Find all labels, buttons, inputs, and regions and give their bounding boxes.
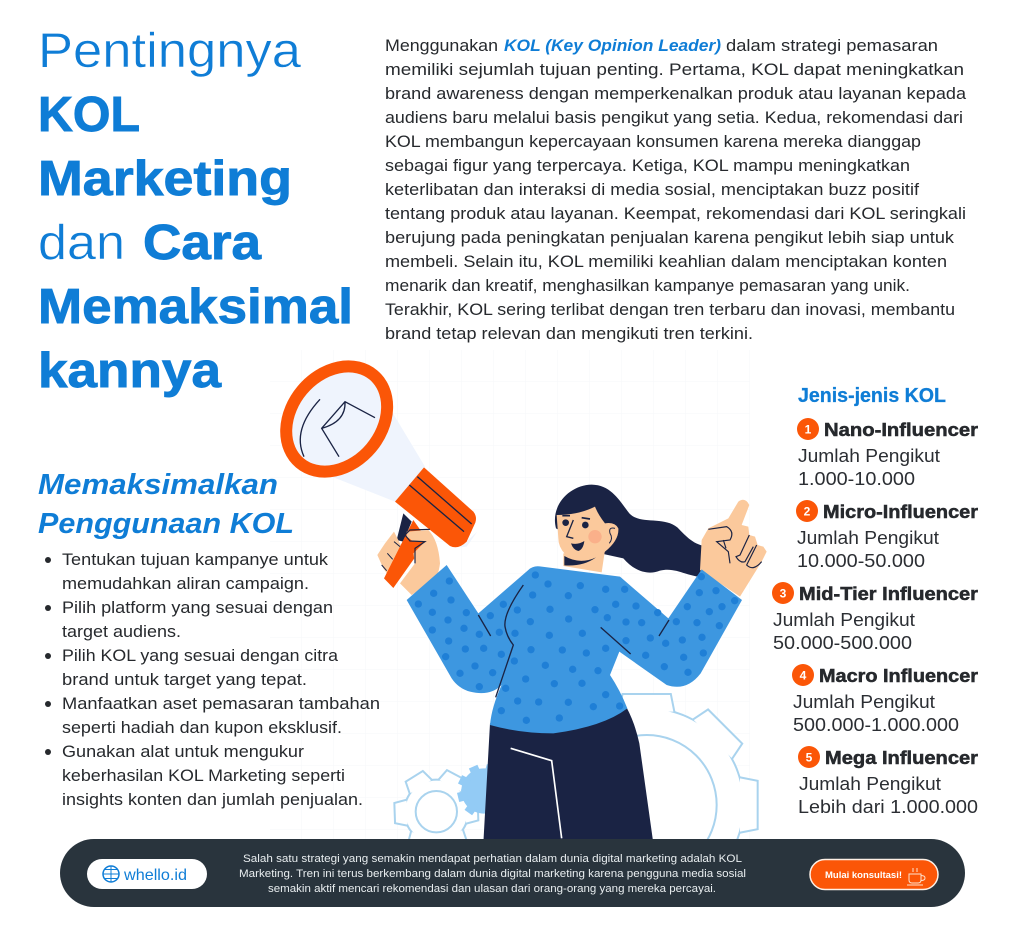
logo pill: whello.id	[87, 859, 207, 889]
intro paragraph: menarik dan kreatif, menghasilkan kampanye pemasaran yang unik.	[385, 277, 910, 295]
bullet list: brand untuk target yang tepat.	[62, 671, 307, 689]
KOL type 2: 10.000-50.000	[797, 551, 925, 571]
bullet list: Gunakan alat untuk mengukur	[62, 743, 305, 761]
KOL type 2: 2	[804, 504, 811, 518]
background grid	[270, 350, 750, 840]
logo pill: whello.id: whello.id	[123, 867, 187, 884]
footer bar	[60, 839, 965, 907]
title: Pentingnya	[38, 24, 302, 78]
KOL type 1: Jumlah Pengikut	[798, 446, 940, 466]
woman: left hand gripping megaphone	[400, 529, 440, 595]
woman: neck and face	[557, 507, 618, 572]
icon: solid gear	[457, 764, 488, 816]
KOL type 4: 4	[800, 668, 807, 682]
intro paragraph: Menggunakan	[385, 37, 498, 55]
bullet list: Pilih KOL yang sesuai dengan citra	[62, 647, 339, 665]
intro paragraph: KOL membangun kepercayaan konsumen karena mereka dianggap	[385, 133, 921, 151]
bullet list: memudahkan aliran campaign.	[62, 575, 309, 593]
bullet list: Pilih platform yang sesuai dengan	[62, 599, 333, 617]
KOL type 4: Jumlah Pengikut	[793, 692, 935, 712]
title	[38, 24, 353, 398]
bullet list: seperti hadiah dan kupon eksklusif.	[62, 719, 342, 737]
title: dan	[38, 216, 125, 270]
intro paragraph: brand tetap relevan dan mengikuti tren terkini.	[385, 325, 753, 343]
KOL type 3: Jumlah Pengikut	[773, 610, 915, 630]
KOL type 2: Micro-Influencer	[823, 502, 978, 522]
bullet list: keberhasilan KOL Marketing seperti	[62, 767, 345, 785]
intro paragraph: Terakhir, KOL sering terlibat dengan tren terbaru dan inovasi, membantu	[385, 301, 955, 319]
intro paragraph: dalam strategi pemasaran	[726, 37, 938, 55]
KOL type 5: Jumlah Pengikut	[799, 774, 941, 794]
KOL type 1: Nano-Influencer	[824, 420, 978, 440]
title: KOL	[38, 88, 140, 142]
bullet list: insights konten dan jumlah penjualan.	[62, 791, 363, 809]
footer text: semakin aktif mencari rekomendasi dan ulasan dari orang-orang yang mereka percayai.	[268, 883, 716, 895]
icon: small gear	[393, 769, 480, 839]
KOL type 1: 1.000-10.000	[798, 469, 915, 489]
title: kannya	[38, 344, 222, 398]
intro paragraph: audiens baru melalui basis pengikut yang setia. Kedua, rekomendasi dari	[385, 109, 963, 127]
bullet list: Tentukan tujuan kampanye untuk	[62, 551, 329, 569]
bullet list: target audiens.	[62, 623, 181, 641]
KOL type 1	[797, 418, 978, 489]
KOL type 4: 500.000-1.000.000	[793, 715, 959, 735]
KOL type 1: 1	[805, 422, 812, 436]
KOL type 5: 5	[806, 750, 813, 764]
heading: Memaksimalkan Penggunaan KOL	[38, 469, 294, 540]
intro paragraph: sebagai figur yang terpercaya. Ketiga, KOL mampu meningkatkan	[385, 157, 910, 175]
intro paragraph: memiliki sejumlah tujuan penting. Pertama, KOL dapat meningkatkan	[385, 61, 964, 79]
KOL type 4	[792, 664, 978, 735]
KOL type 5	[798, 746, 978, 817]
KOL type 5: Lebih dari 1.000.000	[798, 797, 978, 817]
intro paragraph: KOL (Key Opinion Leader)	[504, 37, 722, 55]
KOL type 3	[772, 582, 978, 653]
KOL type 3: 50.000-500.000	[773, 633, 912, 653]
title: Marketing	[38, 152, 292, 206]
woman: right hand	[700, 500, 767, 597]
title: Memaksimal	[38, 280, 353, 334]
intro paragraph: membeli. Selain itu, KOL memiliki keahlian dalam menciptakan konten	[385, 253, 947, 271]
button: Mulai konsultasi	[810, 860, 938, 890]
KOL type 3: Mid-Tier Influencer	[799, 584, 978, 604]
illustration: gears, megaphone and woman	[265, 346, 767, 915]
KOL type 3: 3	[780, 586, 787, 600]
KOL type 4: Macro Influencer	[819, 666, 978, 686]
intro paragraph: keterlibatan dan interaksi di media sosial, menciptakan buzz positif	[385, 181, 919, 199]
intro paragraph: brand awareness dengan memperkenalkan produk atau layanan kepada	[385, 85, 967, 103]
KOL type 2	[796, 500, 978, 571]
footer text	[239, 853, 746, 895]
intro paragraph: berujung pada peningkatan penjualan karena pengikut lebih siap untuk	[385, 229, 955, 247]
bullet list	[45, 551, 380, 809]
button: Mulai konsultasi: Mulai konsultasi!	[825, 870, 902, 881]
bullet list: Manfaatkan aset pemasaran tambahan	[62, 695, 380, 713]
KOL type 5: Mega Influencer	[825, 748, 978, 768]
woman: hair back	[555, 485, 708, 577]
icon: large gear	[621, 693, 759, 839]
intro paragraph	[385, 37, 967, 343]
heading: Memaksimalkan Penggunaan KOL: Penggunaan KOL	[38, 508, 294, 540]
KOL type 2: Jumlah Pengikut	[797, 528, 939, 548]
title: Cara	[143, 216, 262, 270]
footer text: Marketing. Tren ini terus berkembang dalam dunia digital marketing karena pengguna media sosial	[239, 868, 746, 880]
woman: polka dot sweater	[407, 565, 742, 733]
footer text: Salah satu strategi yang semakin mendapat perhatian dalam dunia digital marketing adalah KOL	[243, 853, 742, 865]
woman: trousers	[483, 708, 653, 843]
heading: Jenis-jenis KOL: Jenis-jenis KOL	[798, 385, 946, 407]
intro paragraph: tentang produk atau layanan. Keempat, rekomendasi dari KOL seringkali	[385, 205, 966, 223]
megaphone	[280, 360, 476, 588]
heading: Memaksimalkan Penggunaan KOL: Memaksimalkan	[38, 469, 278, 501]
